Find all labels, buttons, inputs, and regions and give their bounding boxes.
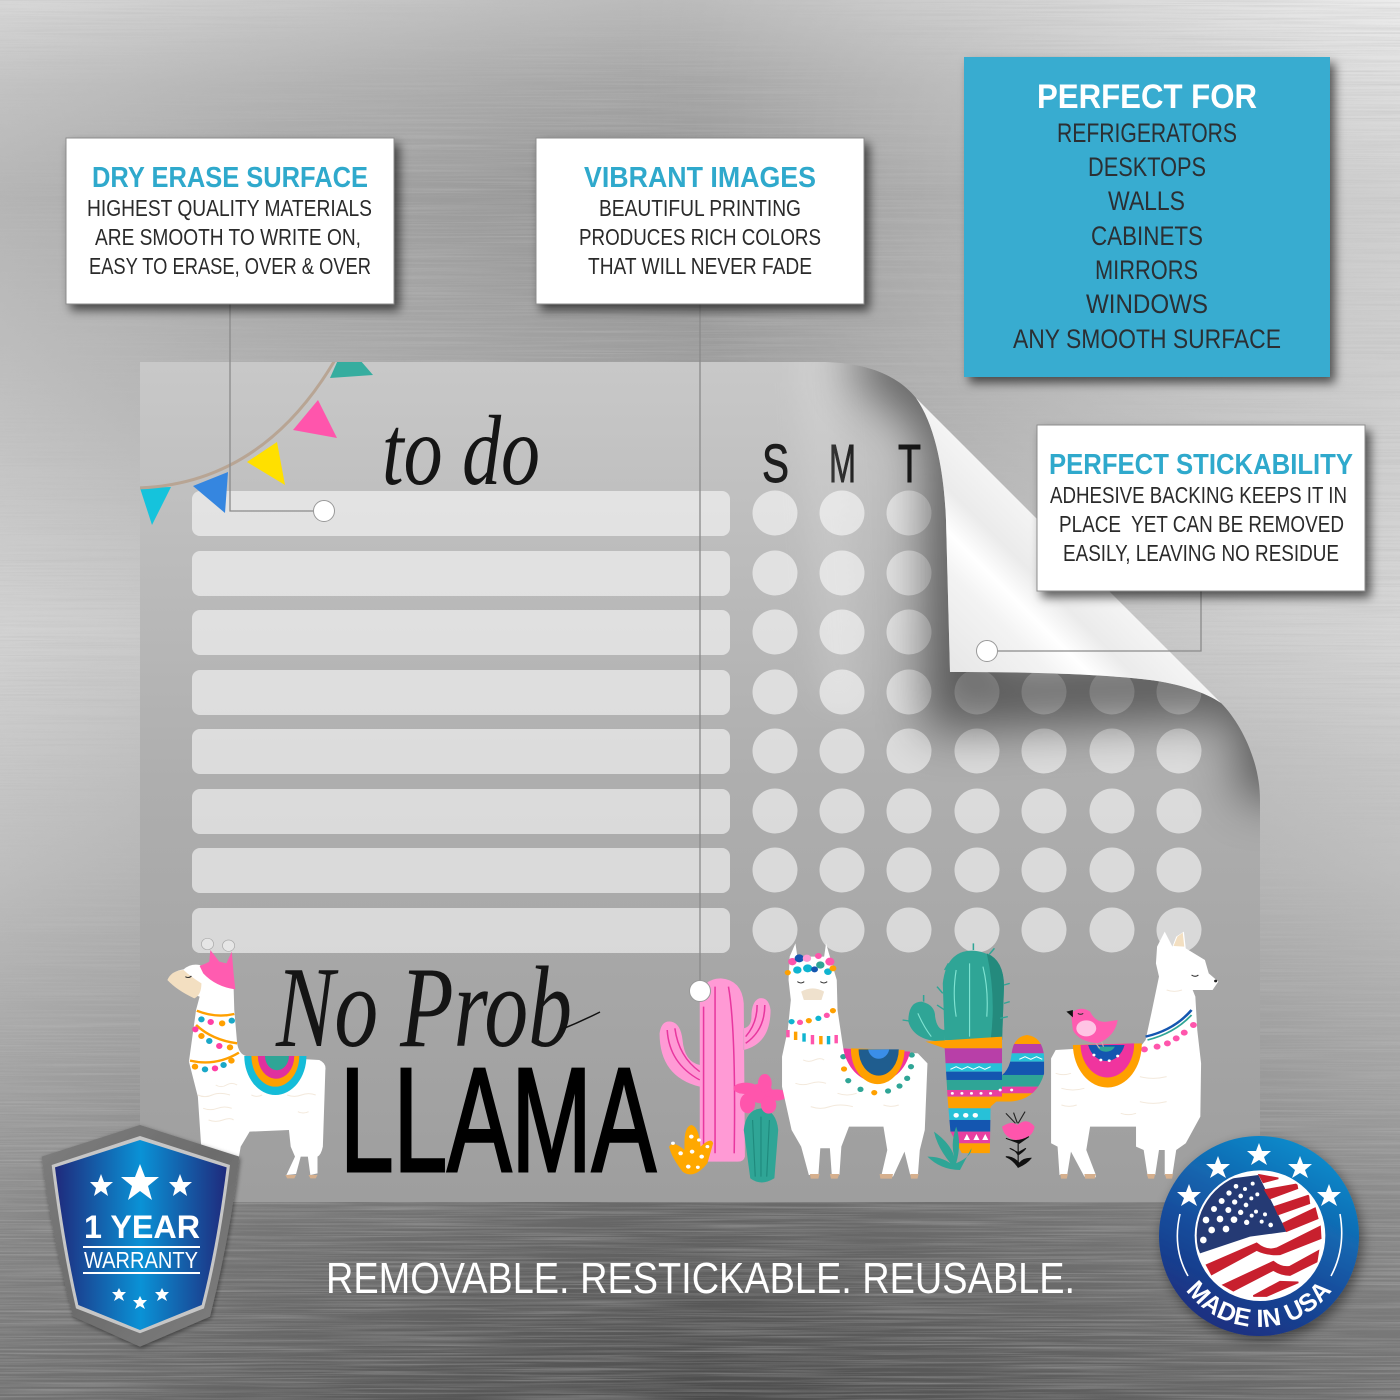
illustration: cacti and llamas (660, 932, 1218, 1182)
pink bird (1066, 1009, 1118, 1048)
tagline: REMOVABLE. RESTICKABLE. REUSABLE. (326, 1254, 1075, 1303)
body text (87, 195, 372, 279)
heading: to do: to do (382, 395, 540, 506)
illustration: No Prob LLAMA title: No Prob (275, 944, 572, 1072)
heading: PERFECT FOR (1037, 78, 1257, 116)
callout: perfect stickability (1037, 425, 1365, 591)
badge: made in usa: MADE IN USA (1186, 1280, 1332, 1328)
stars (1177, 1143, 1341, 1206)
weekday letters: M (829, 434, 856, 494)
illustration: No Prob LLAMA title: LLAMA (340, 1038, 656, 1203)
habit tracker dots (752, 490, 1202, 952)
body text (579, 195, 821, 279)
panel: perfect for (964, 57, 1330, 377)
connector: perfect stickability (976, 591, 1201, 662)
surface list: ANY SMOOTH SURFACE (1013, 324, 1281, 354)
heading: DRY ERASE SURFACE (92, 162, 368, 194)
middle llama (782, 943, 927, 1179)
panel: dry erase chart sheet (138, 340, 1275, 1203)
body text: HIGHEST QUALITY MATERIALS (87, 195, 372, 221)
badge: made in usa (1156, 1134, 1368, 1346)
surface list: WALLS (1108, 186, 1185, 216)
right llama (1051, 932, 1218, 1179)
body text (1050, 482, 1347, 566)
green cactus (903, 943, 1010, 1042)
surface list (1013, 118, 1281, 354)
body text: PRODUCES RICH COLORS (579, 224, 821, 250)
stars (90, 1164, 192, 1309)
curl shading (815, 340, 1275, 800)
weekday letters (764, 444, 920, 483)
badge text: 1 YEAR (84, 1209, 200, 1245)
body text: BEAUTIFUL PRINTING (599, 195, 801, 221)
fold-over white backing (916, 398, 1221, 703)
badge: 1 year warranty (42, 1125, 239, 1347)
striped cactus (926, 1035, 1044, 1154)
badge text (1168, 1236, 1350, 1327)
task rows (192, 491, 730, 953)
surface list: MIRRORS (1095, 255, 1198, 285)
connector: vibrant images (690, 304, 710, 1002)
surface list: CABINETS (1091, 221, 1203, 251)
flag (1192, 1170, 1325, 1301)
callout: vibrant images (536, 138, 864, 304)
badge text (83, 1209, 200, 1274)
body text: EASY TO ERASE, OVER & OVER (89, 253, 371, 279)
weekday letters: S (762, 434, 789, 494)
illustration: left llama (167, 938, 325, 1178)
body text: THAT WILL NEVER FADE (588, 253, 812, 279)
pink cactus (660, 978, 771, 1162)
teal flowering cactus (733, 1074, 787, 1182)
bunting (138, 360, 373, 525)
orange cactus (669, 1125, 713, 1174)
surface list: REFRIGERATORS (1057, 118, 1237, 148)
leafy plant (927, 1127, 971, 1170)
illustration: No Prob LLAMA title (275, 944, 656, 1203)
badge text: WARRANTY (84, 1247, 198, 1273)
heading: PERFECT STICKABILITY (1049, 449, 1353, 481)
weekday letters: T (898, 434, 921, 494)
surface list: DESKTOPS (1088, 152, 1206, 182)
connector: dry erase surface (230, 304, 334, 522)
body text: ARE SMOOTH TO WRITE ON, (95, 224, 361, 250)
heading: VIBRANT IMAGES (584, 162, 816, 194)
body text: EASILY, LEAVING NO RESIDUE (1063, 540, 1339, 566)
black and pink flower (1002, 1112, 1035, 1167)
surface list: WINDOWS (1086, 289, 1208, 319)
callout: dry erase surface (66, 138, 394, 304)
